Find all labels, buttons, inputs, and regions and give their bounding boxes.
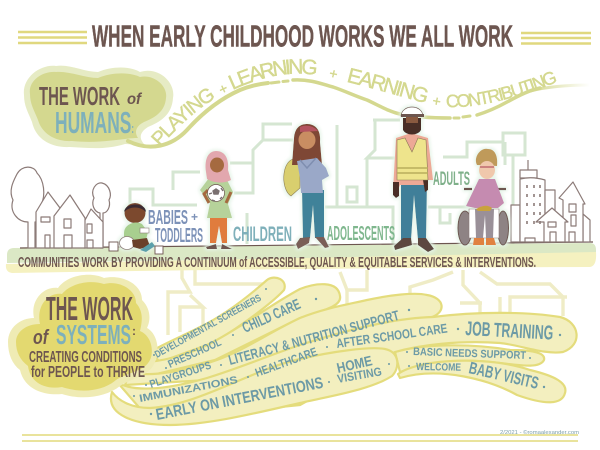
heading: of systems: of (33, 327, 50, 349)
heading: of systems: SYSTEMS (56, 319, 131, 350)
curved text: playing learning earning contributing: + (433, 98, 440, 105)
title rules right (521, 33, 591, 44)
panel: the work of systems bubble (8, 275, 158, 397)
text: home visiting (335, 352, 383, 386)
person: baby (120, 203, 155, 252)
label: babies and toddlers: BABIES (148, 207, 188, 229)
pipes: green city network (130, 120, 525, 245)
title rules left (18, 32, 87, 43)
label: children: CHILDREN (233, 223, 292, 246)
curved text: playing learning earning contributing: + (220, 85, 227, 92)
text: preschool: PRESCHOOL (166, 337, 223, 371)
text: ADOLESCENTS (327, 223, 395, 245)
houses and trees left (11, 167, 110, 248)
heading: the work of: of (127, 91, 143, 108)
subheading: creating conditions: CREATING CONDITIONS (29, 349, 142, 366)
text: home visiting: VISITING (336, 364, 383, 386)
panel: service ribbons (111, 278, 577, 425)
curved text: playing learning earning contributing: EARNING (348, 68, 428, 102)
curved text: playing learning earning contributing: + (330, 70, 338, 78)
label: babies and toddlers (148, 207, 203, 247)
heading: of systems: : (132, 324, 136, 338)
separator dots (133, 288, 561, 415)
person: wheelchair user (458, 149, 508, 245)
text: developmental screeners: DEVELOPMENTAL SCREENERS (153, 293, 264, 361)
text: literacy and nutrition support: LITERACY & NUTRITION SUPPORT (227, 307, 401, 368)
panel: the work of systems bubble: THE WORK (46, 290, 133, 327)
curved text: playing learning earning contributing: PLAYING (150, 88, 214, 144)
curved text: playing learning earning contributing (150, 58, 556, 144)
heading: the work of: THE WORK (39, 81, 120, 111)
credit: 2/2021 - ©romaalexander.com (500, 429, 579, 436)
subheading: for people to thrive: for PEOPLE to THRIVE (31, 364, 145, 381)
text: basic needs support: BASIC NEEDS SUPPORT (413, 346, 526, 362)
text: TODDLERS (155, 225, 203, 247)
text: early on interventions: EARLY ON INTERVENTIONS (155, 375, 325, 424)
swoosh line (128, 80, 590, 147)
person: girl with soccer ball (200, 151, 233, 249)
heading: of systems (33, 319, 136, 350)
person: construction worker (393, 107, 434, 252)
curved text: playing learning earning contributing: CONTRIBUTING (446, 72, 556, 108)
icon: toy blocks (109, 242, 163, 254)
text: home visiting: HOME (335, 352, 374, 376)
label: babies and toddlers: + (191, 210, 198, 224)
text: immunizations: IMMUNIZATIONS (138, 374, 239, 405)
text: after school care: AFTER SCHOOL CARE (335, 320, 449, 351)
text: ADULTS (433, 169, 470, 190)
heading: humans: HUMANS: (55, 105, 134, 140)
pipes: yellow systems network (168, 270, 567, 335)
text: child care: CHILD CARE (240, 296, 303, 337)
ribbon labels (133, 288, 561, 424)
text: welcome: WELCOME (416, 361, 461, 374)
houses and buildings right (511, 160, 590, 242)
text: playgroups: PLAYGROUPS (148, 360, 213, 391)
ground band (6, 242, 596, 273)
bottom rules (22, 435, 578, 441)
text: baby visits: BABY VISITS (467, 358, 541, 393)
text: healthcare: HEALTHCARE (253, 344, 319, 380)
panel: the work of humans bubble (24, 66, 173, 148)
curved text: playing learning earning contributing: LEARNING (228, 58, 316, 90)
person: adolescent (284, 124, 329, 249)
